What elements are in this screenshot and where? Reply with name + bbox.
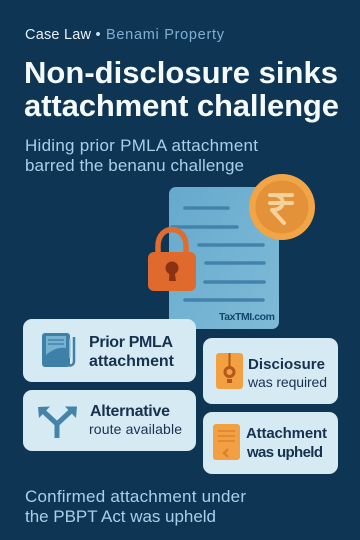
- icon: padlock: [148, 230, 196, 291]
- footer note: the PBPT Act was upheld: [25, 507, 216, 526]
- document: [169, 187, 279, 329]
- footer note: [25, 487, 246, 526]
- watermark: TaxTMI.com: [219, 311, 275, 323]
- subtitle: Hiding prior PMLA attachment: [25, 136, 258, 155]
- subtitle: [25, 136, 258, 175]
- footer note: Confirmed attachment under: [25, 487, 246, 506]
- icon: forking arrow: [38, 406, 77, 438]
- title: [24, 55, 339, 123]
- card: attachment upheld: Attachment: [246, 425, 327, 442]
- icon: file with clip: [42, 333, 74, 367]
- kicker: Benami Property: [106, 27, 225, 43]
- card: prior PMLA attachment: Prior PMLA: [89, 334, 173, 351]
- card: attachment upheld: [203, 412, 338, 474]
- icon: rupee coin: [249, 174, 315, 240]
- card: disclosure required: [203, 338, 338, 404]
- icon: orange document: [213, 424, 240, 460]
- kicker: •: [96, 27, 101, 43]
- kicker: Case Law: [25, 27, 92, 43]
- title: Non-disclosure sinks: [24, 55, 338, 90]
- kicker: [25, 27, 225, 43]
- card: prior PMLA attachment: [23, 319, 196, 382]
- card: disclosure required: Disciosure: [248, 356, 325, 373]
- card: alternative route: [23, 390, 196, 451]
- illustration: document with lock and coin: [148, 174, 315, 329]
- title: attachment challenge: [24, 88, 339, 123]
- card: alternative route: Alternative: [90, 403, 170, 420]
- card: prior PMLA attachment: attachment: [89, 353, 175, 370]
- card: alternative route: route available: [89, 421, 182, 437]
- card: disclosure required: was required: [247, 374, 327, 390]
- subtitle: barred the benanu challenge: [25, 156, 244, 175]
- icon: orange keyhole tag: [216, 353, 243, 389]
- card: attachment upheld: was upheld: [246, 444, 323, 461]
